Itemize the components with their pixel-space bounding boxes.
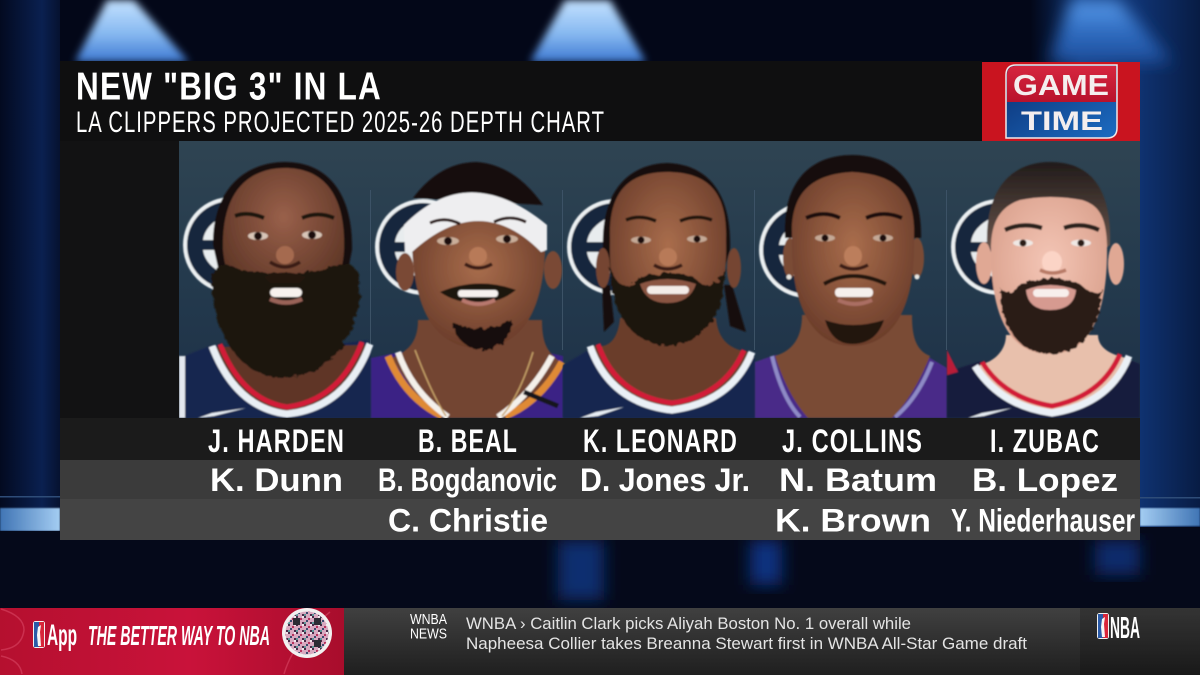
starters row bbox=[60, 418, 1140, 460]
backup: B. Lopez: B. Lopez bbox=[972, 462, 1118, 498]
photo strip background bbox=[179, 141, 1140, 418]
title: NEW "BIG 3" IN LA bbox=[76, 66, 382, 108]
header bar bbox=[60, 61, 982, 141]
Game Time logo bbox=[982, 62, 1140, 141]
QR code bbox=[282, 608, 332, 658]
news headline bbox=[466, 614, 1027, 653]
reserve: K. Brown: K. Brown bbox=[775, 502, 931, 538]
player portrait: J. Harden bbox=[179, 162, 371, 418]
reserve: Y. Niederhauser: Y. Niederhauser bbox=[951, 502, 1135, 538]
player portrait: J. Collins bbox=[755, 155, 947, 418]
backup: N. Batum: N. Batum bbox=[779, 462, 937, 498]
NBA logo bbox=[1097, 610, 1140, 645]
player portrait: B. Beal bbox=[371, 162, 563, 418]
news label: NEWS bbox=[410, 626, 447, 642]
third unit row bbox=[60, 499, 1140, 540]
label: App: App bbox=[47, 619, 77, 652]
starter: I. Zubac: I. ZUBAC bbox=[990, 423, 1100, 459]
Game Time logo: TIME bbox=[1021, 106, 1103, 136]
news headline: Napheesa Collier takes Breanna Stewart first in WNBA All-Star Game draft bbox=[466, 634, 1027, 653]
bottom ticker bbox=[0, 608, 1200, 675]
Game Time logo: GAME bbox=[1013, 70, 1109, 102]
starter: K. Leonard: K. LEONARD bbox=[583, 423, 738, 459]
backup: K. Dunn: K. Dunn bbox=[210, 462, 343, 498]
bottom ticker: NBA bbox=[1110, 610, 1140, 645]
news headline: WNBA › Caitlin Clark picks Aliyah Boston No. 1 overall while bbox=[466, 614, 911, 633]
panel: depth chart bbox=[60, 61, 1140, 540]
backup: B. Bogdanovic: B. Bogdanovic bbox=[378, 462, 557, 498]
news label bbox=[410, 611, 447, 642]
subtitle: LA CLIPPERS PROJECTED 2025-26 DEPTH CHART bbox=[76, 106, 605, 139]
starter: J. Collins: J. COLLINS bbox=[782, 423, 923, 459]
player portrait: K. Leonard bbox=[563, 163, 755, 418]
left spacer column bbox=[60, 141, 179, 418]
backup: D. Jones Jr.: D. Jones Jr. bbox=[580, 462, 750, 498]
app promo banner bbox=[0, 608, 344, 675]
reserve: C. Christie: C. Christie bbox=[388, 502, 548, 538]
slogan: THE BETTER WAY TO NBA bbox=[88, 620, 270, 651]
icon: NBA logo small bbox=[33, 621, 45, 648]
starter: J. Harden: J. HARDEN bbox=[208, 423, 345, 459]
news label: WNBA bbox=[410, 611, 447, 628]
player portrait: I. Zubac bbox=[947, 162, 1140, 418]
starter: B. Beal: B. BEAL bbox=[418, 423, 518, 459]
second unit row bbox=[60, 460, 1140, 499]
